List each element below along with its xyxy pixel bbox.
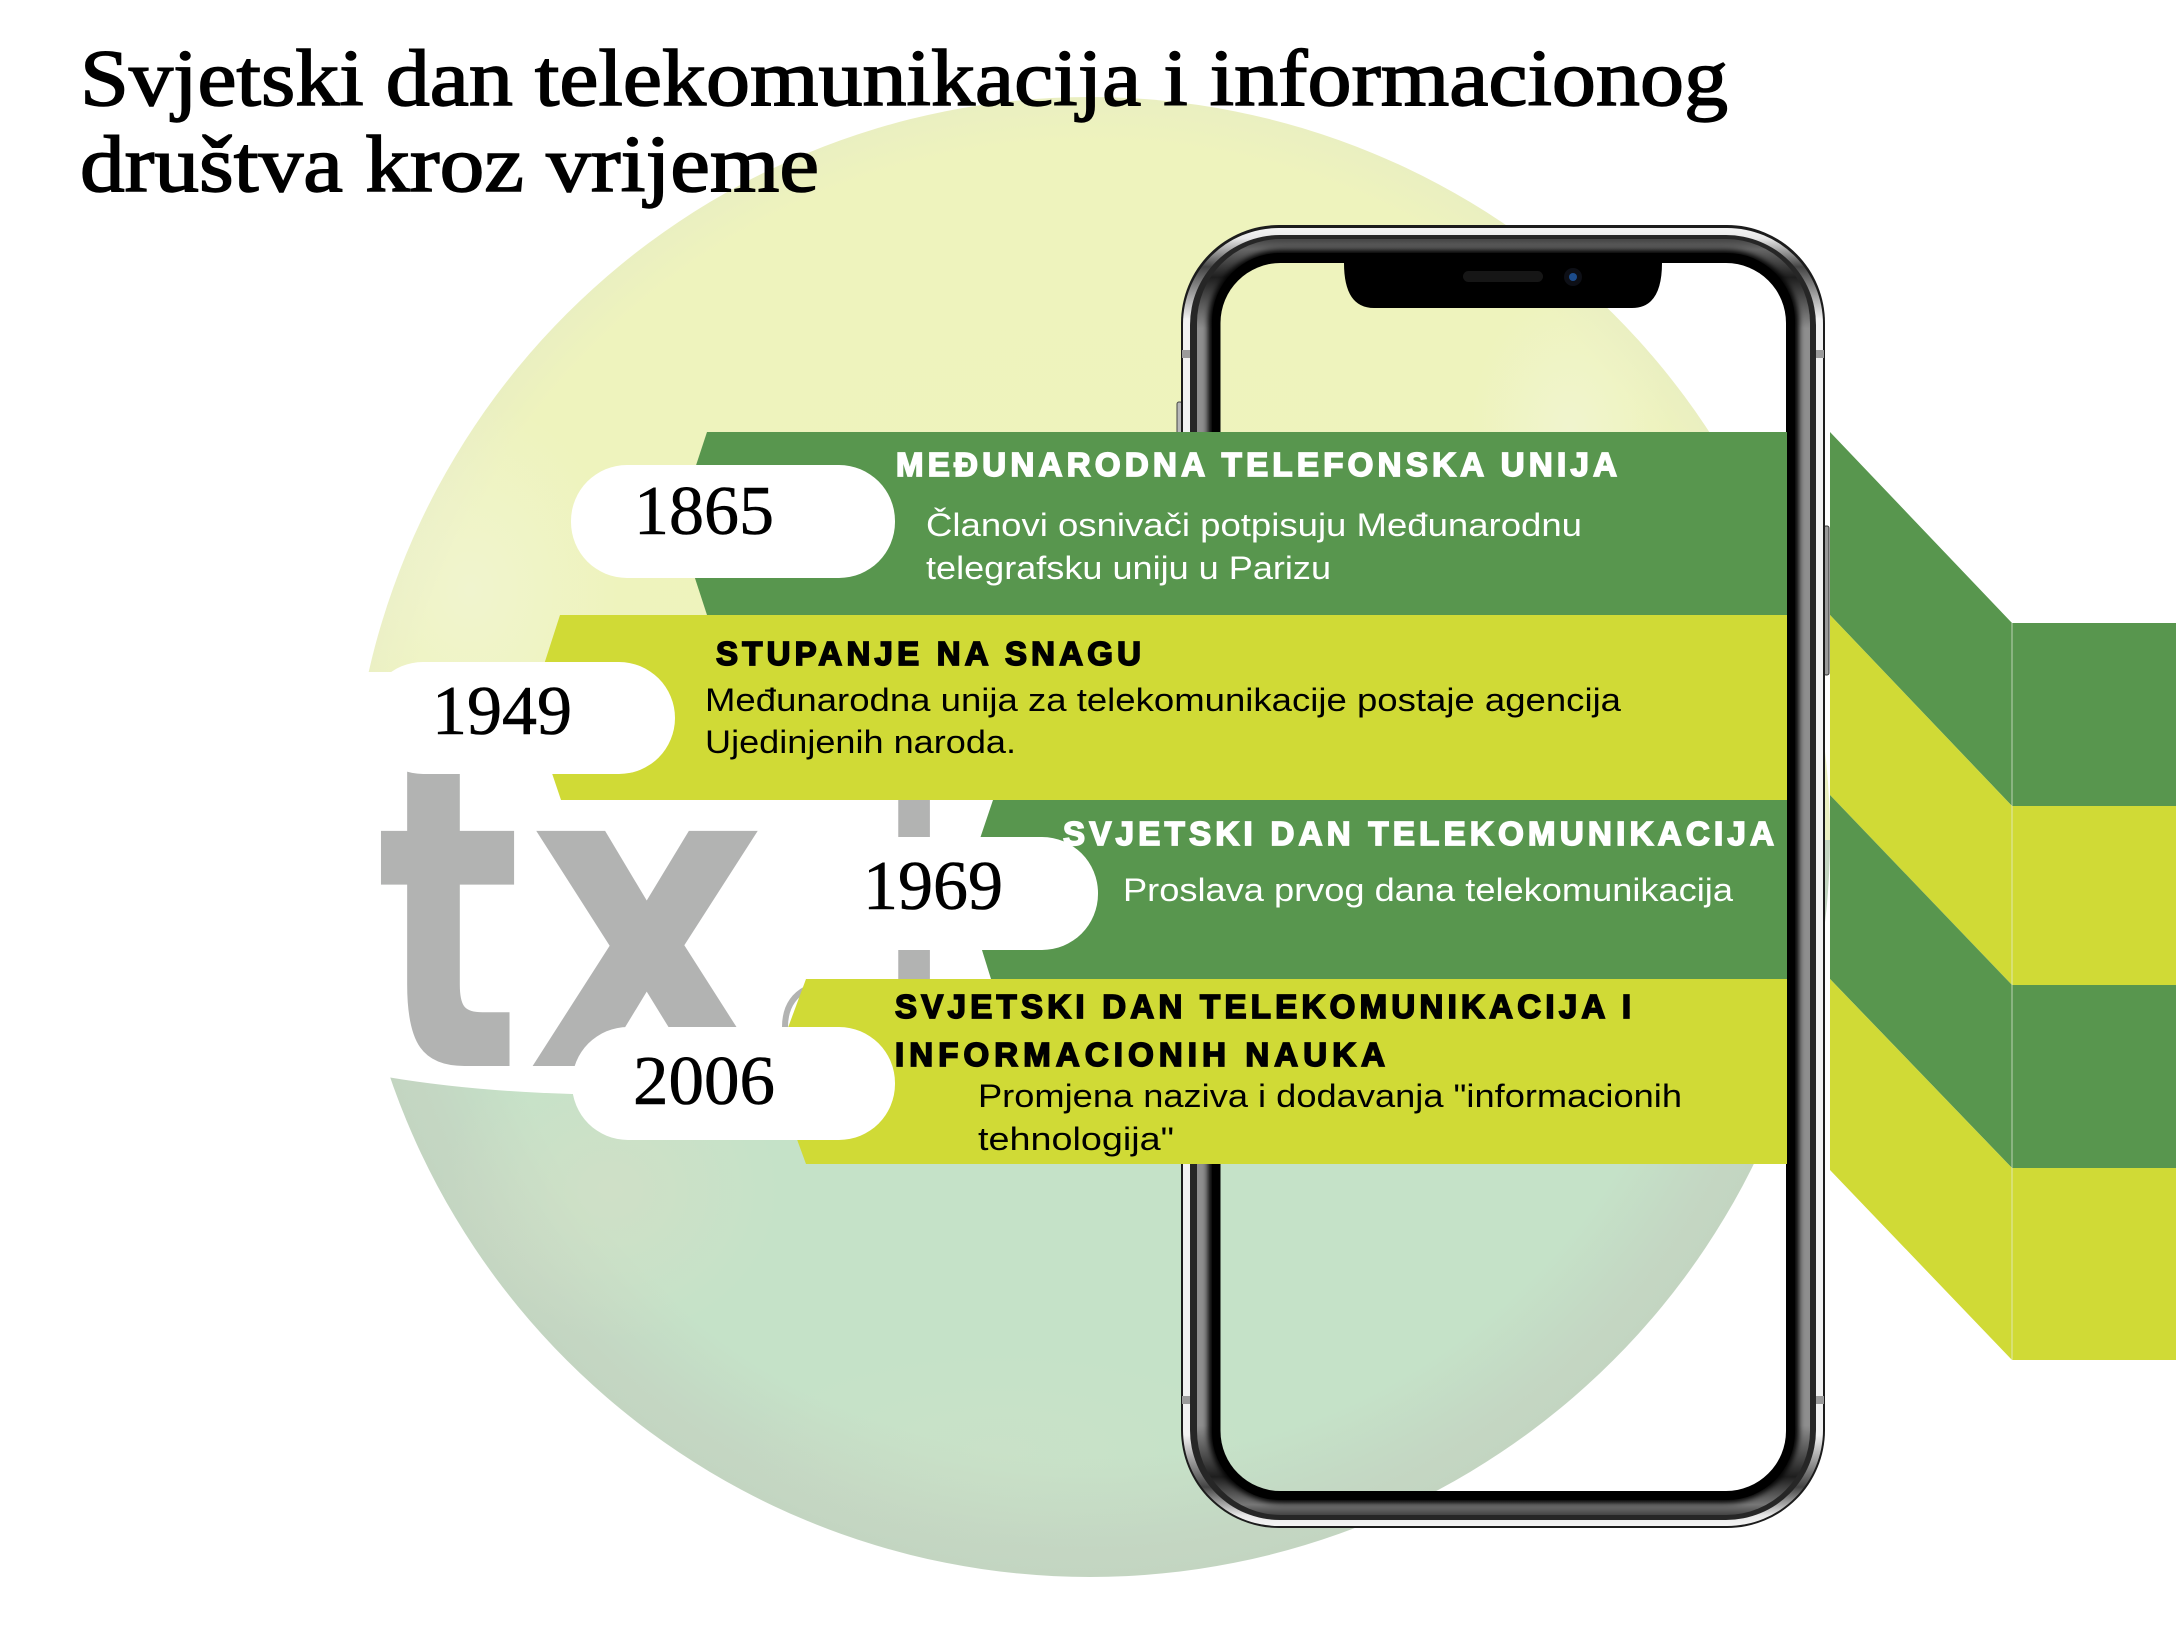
grey letter x: x [527,668,767,1168]
text block: 1969 [1063,815,1774,908]
text block: 1969: Proslava prvog dana telekomunikacija [1123,872,1733,908]
text block: 2006: INFORMACIONIH NAUKA [895,1036,1385,1073]
white overlay shape [300,672,1000,1100]
pill: 1969 [774,837,1098,950]
circle: lower pale green half [390,840,1830,1577]
antenna bands [1182,350,1824,1404]
grey letter arc fragment [785,989,806,1027]
pill: 1969: 1969 [863,848,1003,925]
text block: 1949 [705,635,1621,760]
camera [1564,268,1582,286]
text block: 1865: telegrafsku uniju u Parizu [926,550,1331,586]
grey letter t: t [377,668,521,1168]
band: 2006 [772,979,1787,1164]
text block: 1865: Članovi osnivači potpisuju Međunarodnu [926,507,1582,543]
text block: 1949: Ujedinjenih naroda. [705,724,1016,760]
text block: 2006: Promjena naziva i dodavanja "informacionih [978,1078,1682,1114]
ribbon segment: yellow 1 [1830,615,2176,985]
pill: 2006: 2006 [633,1043,775,1120]
text block: 2006 [895,988,1682,1157]
white overlay band with grey letters [300,668,1000,1168]
text block: 1865 [896,446,1617,586]
grey letter stem: l [874,715,954,1117]
circle: upper pale yellow half [368,97,1830,840]
ribbon segment: yellow 2 [1830,979,2176,1360]
band: 1865 [677,432,1787,615]
text block: 1969: SVJETSKI DAN TELEKOMUNIKACIJA [1063,815,1774,852]
title [80,35,1728,209]
phone body rings [1181,225,1825,1528]
pill: 1949 [367,662,675,774]
right side button [1824,526,1829,675]
right ribbon [1830,432,2176,1360]
text block: 2006: tehnologija" [978,1121,1174,1157]
band: 1969 [963,800,1787,979]
band: 1949 [530,615,1787,800]
text block: 1949: Međunarodna unija za telekomunikacije postaje agencija [705,682,1621,718]
text block: 1865: MEĐUNARODNA TELEFONSKA UNIJA [896,446,1617,483]
pill: 1865 [571,465,895,578]
title: Svjetski dan telekomunikacija i informacionog [80,35,1728,123]
pill: 1949: 1949 [432,673,572,750]
smartphone frame [1177,225,1829,1528]
notch [1338,258,1668,308]
ribbon segment: green 1 [1830,432,2176,806]
circle highlights [320,290,1670,1550]
pill: 2006 [572,1027,895,1140]
pill: 1865: 1865 [634,473,774,550]
title: društva kroz vrijeme [80,121,819,209]
left side button [1177,402,1182,522]
text block: 1949: STUPANJE NA SNAGU [716,635,1141,672]
speaker [1463,271,1543,282]
background circle [320,97,1830,1577]
text block: 2006: SVJETSKI DAN TELEKOMUNIKACIJA I [895,988,1631,1025]
ribbon segment: green 2 [1830,795,2176,1168]
